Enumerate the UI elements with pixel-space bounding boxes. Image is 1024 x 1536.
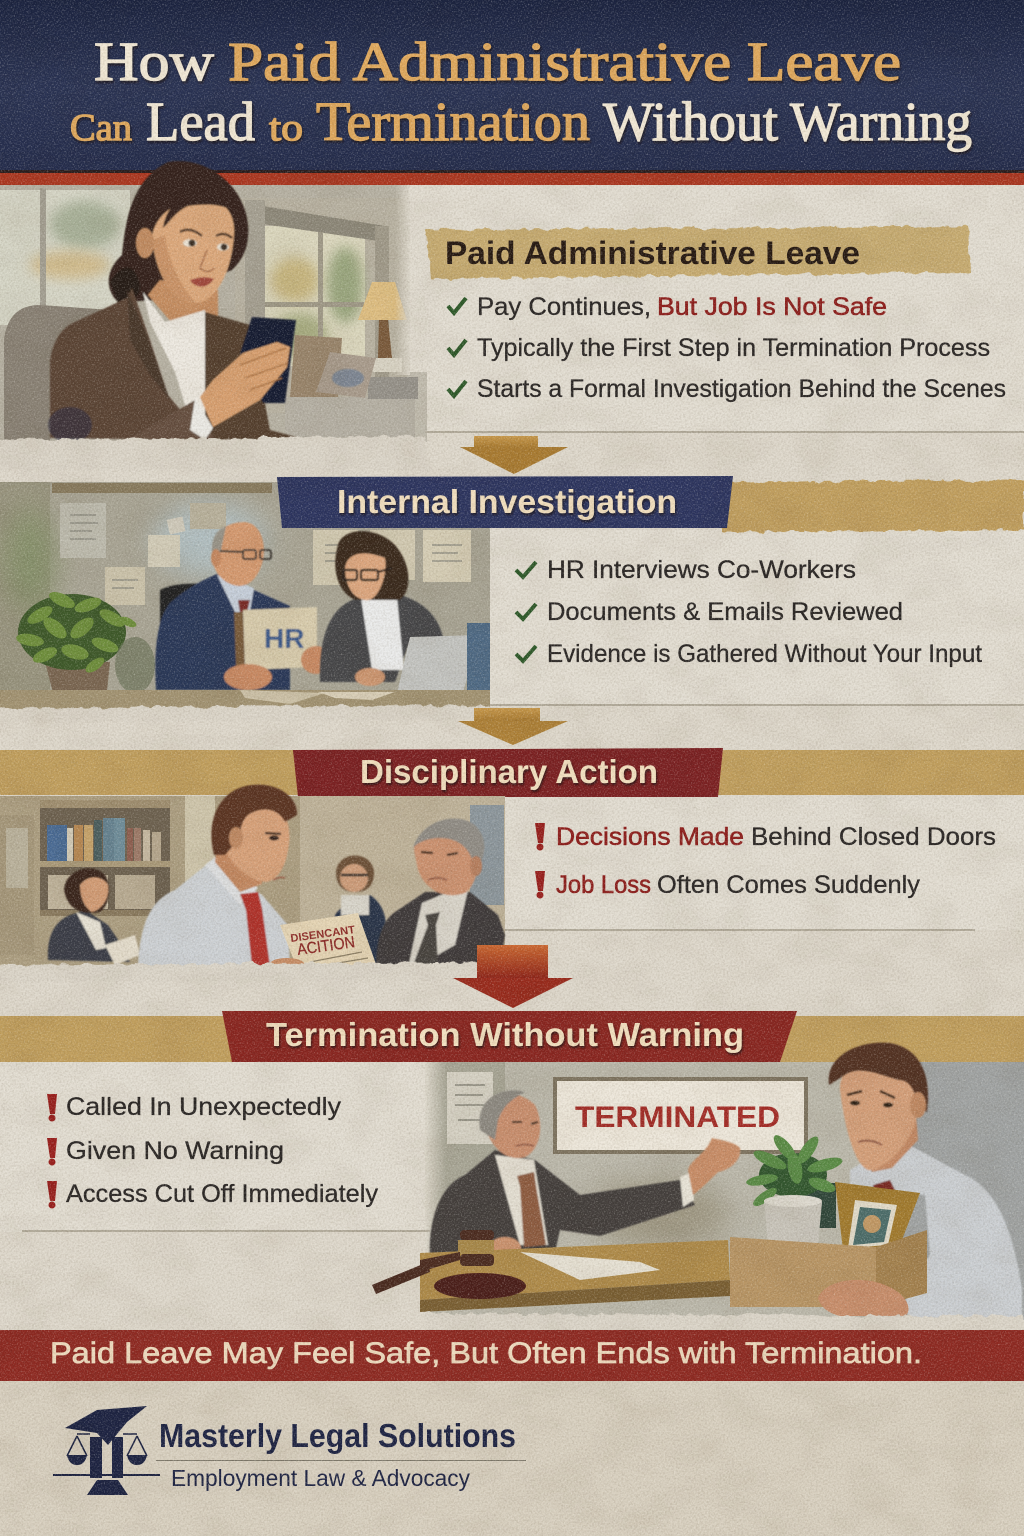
checklist: Starts a Formal Investigation Behind the Scenes — [477, 375, 1006, 403]
warning list: Behind Closed Doors — [751, 823, 996, 851]
warning list: Called In Unexpectedly — [66, 1093, 342, 1121]
young man in white shirt — [138, 785, 297, 968]
warning list: Given No Warning — [66, 1137, 284, 1165]
checklist — [516, 556, 982, 668]
woman with laptop — [320, 531, 443, 686]
laptop — [390, 635, 480, 695]
manager — [430, 1090, 740, 1259]
banner: termination without warning: Termination Without Warning — [266, 1016, 744, 1053]
desk — [0, 690, 490, 710]
checklist: Documents & Emails Reviewed — [547, 598, 903, 626]
illustration: HR review — [0, 482, 490, 722]
gavel — [372, 1230, 526, 1299]
banner: internal investigation — [277, 476, 1024, 532]
banner: termination without warning — [0, 1011, 1024, 1062]
checklist: Evidence is Gathered Without Your Input — [547, 640, 982, 668]
checklist: Pay Continues, — [477, 293, 651, 321]
warning list: Decisions Made — [556, 823, 744, 851]
man with HR folder — [155, 522, 331, 690]
plant in pot — [745, 1132, 844, 1245]
bookshelf — [40, 800, 170, 916]
woman — [48, 161, 300, 443]
disciplinary action document: ACITION — [296, 934, 356, 959]
arrow 1 — [460, 436, 568, 474]
torn edge — [0, 436, 430, 470]
logo icon: scales and cap — [53, 1406, 160, 1495]
illustration: disciplinary meeting — [0, 785, 520, 982]
warning list: Job Loss — [556, 871, 651, 899]
sofa — [285, 335, 418, 437]
checklist: Typically the First Step in Termination Process — [477, 334, 990, 362]
binder — [467, 623, 490, 693]
banner: internal investigation: Internal Investigation — [337, 483, 677, 520]
panel: internal investigation — [0, 476, 1024, 722]
lamp — [358, 282, 407, 372]
text area background — [405, 185, 1024, 432]
title: Lead — [146, 91, 255, 152]
title: Without — [603, 91, 778, 152]
title: Termination — [316, 91, 590, 152]
title: Paid Administrative Leave — [228, 31, 901, 92]
title: How — [94, 31, 214, 92]
company name: Masterly Legal Solutions — [159, 1417, 516, 1454]
heading strip: Paid Administrative Leave — [445, 235, 860, 271]
arrow 2 — [458, 708, 568, 745]
panel: paid administrative leave — [0, 161, 1024, 470]
warning list — [47, 1093, 378, 1208]
man with HR folder: HR — [264, 623, 304, 654]
terminated sign — [553, 1077, 808, 1154]
older man in suit — [376, 818, 505, 968]
footer paper — [0, 1381, 1024, 1536]
illustration: woman checking phone at home — [0, 161, 430, 470]
disciplinary action document — [269, 913, 377, 972]
colleague in background — [335, 856, 386, 970]
right fade — [395, 185, 410, 375]
tagline: Employment Law & Advocacy — [171, 1465, 470, 1491]
papers — [520, 1252, 660, 1280]
checklist: But Job Is Not Safe — [657, 293, 887, 321]
title: to — [269, 107, 303, 149]
arrow 3 — [453, 945, 573, 1008]
title: Warning — [790, 91, 972, 152]
bottom banner — [0, 1330, 1024, 1381]
banner: disciplinary action: Disciplinary Action — [360, 753, 658, 790]
title — [70, 31, 972, 152]
woman in background left — [48, 868, 140, 965]
plant — [15, 589, 155, 700]
picture frame — [835, 1182, 920, 1250]
warning list: Often Comes Suddenly — [657, 871, 920, 899]
title: Can — [70, 107, 132, 149]
cardboard box — [730, 1230, 927, 1316]
desk — [420, 1240, 730, 1300]
disciplinary action document: DISENCANT — [290, 924, 356, 945]
checklist: HR Interviews Co-Workers — [547, 556, 856, 584]
checklist — [448, 293, 1006, 403]
man with box — [829, 1043, 1022, 1318]
header band — [0, 0, 1024, 185]
warning list: Access Cut Off Immediately — [66, 1180, 378, 1208]
armchair — [4, 305, 112, 442]
bottom banner: Paid Leave May Feel Safe, But Often Ends with Termination. — [50, 1337, 922, 1370]
torn edge — [0, 705, 490, 722]
warning list — [535, 823, 996, 899]
illustration: termination meeting — [372, 1043, 1024, 1332]
banner: disciplinary action — [0, 748, 1024, 797]
panel: termination without warning — [0, 1011, 1024, 1332]
terminated sign: TERMINATED — [575, 1101, 780, 1134]
logo: masterly legal solutions — [53, 1406, 526, 1495]
heading strip — [426, 226, 970, 279]
panel: disciplinary action — [0, 748, 1024, 982]
